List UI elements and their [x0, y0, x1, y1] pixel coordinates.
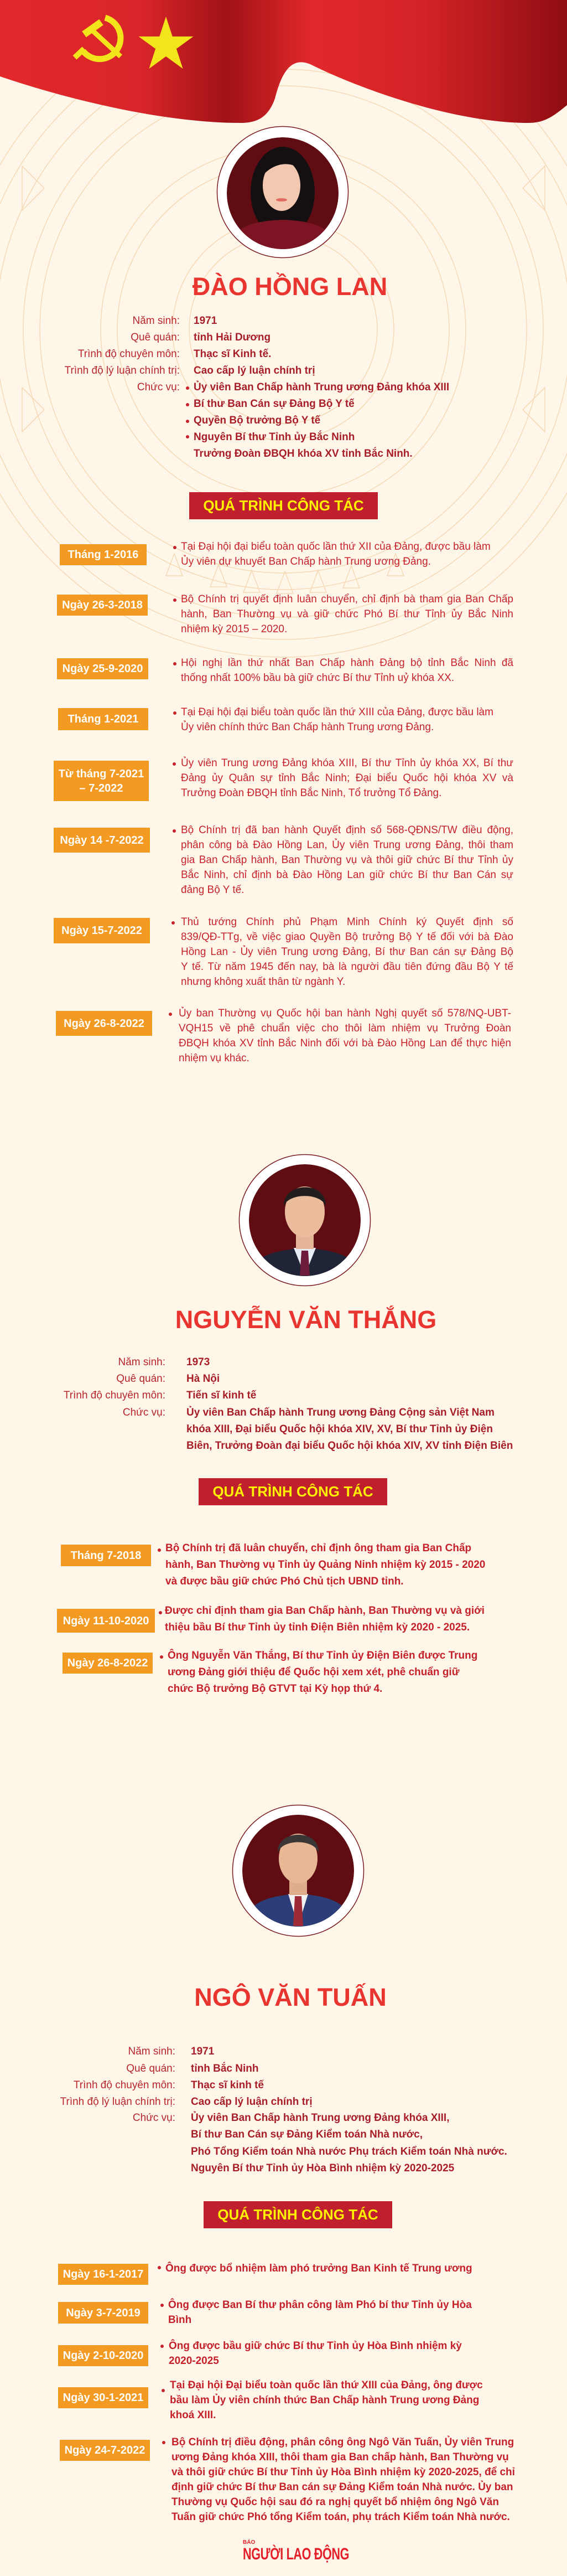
info: Nguyen Van Thang: Quê quán: [116, 1373, 165, 1385]
text: ương Đảng khóa XIII, thôi tham gia Ban chấp hành, Ban Thường vụ [171, 2451, 509, 2463]
info: Nguyen Van Thang: Hà Nội [186, 1373, 220, 1385]
timeline 2: Ngày 26-8-2022 [67, 1657, 148, 1669]
info: Ngo Van Tuan: Trình độ chuyên môn: [74, 2079, 175, 2091]
info: Ngo Van Tuan: Nguyên Bí thư Tỉnh ủy Hòa Bình nhiệm kỳ 2020-2025 [191, 2162, 454, 2174]
info: Dao Hong Lan: Quê quán: [131, 332, 180, 343]
text: gia Ban Chấp hành, Ban Thường vụ và thôi giữ chức Bí thư Tỉnh ủy [181, 854, 513, 866]
name: Ngo Van Tuan: NGÔ VĂN TUẤN [194, 1983, 387, 2011]
text: Thủ tướng Chính phủ Phạm Minh Chính ký Quyết định số [181, 916, 513, 928]
timeline 3: Ngày 30-1-2021 [63, 2392, 143, 2404]
text: bầu làm Ủy viên chính thức Ban Chấp hành Trung ương Đảng [170, 2394, 479, 2406]
info: Ngo Van Tuan: Bí thư Ban Cán sự Đảng Kiểm toán Nhà nước, [191, 2129, 423, 2140]
text: Ông được bầu giữ chức Bí thư Tỉnh ủy Hòa Bình nhiệm kỳ [169, 2340, 462, 2352]
text: đảng Bộ Y tế. [181, 884, 244, 896]
timeline 2 [57, 1545, 163, 1674]
info: Ngo Van Tuan: Cao cấp lý luận chính trị [191, 2096, 313, 2108]
info: Nguyen Van Thang: Năm sinh: [118, 1356, 165, 1368]
timeline text 2: Bộ Chính trị đã luân chuyển, chỉ định ông tham gia Ban Chấp [165, 1542, 471, 1554]
photo: Dao Hong Lan [217, 126, 348, 258]
text: Ủy viên Trung ương Đảng khóa XIII, Bí thư Tỉnh ủy khóa XX, Bí thư [181, 757, 513, 769]
info: Nguyen Van Thang: Chức vụ: [123, 1407, 165, 1418]
timeline 1: Ngày 14 -7-2022 [60, 834, 144, 846]
text: và thôi giữ chức Bí thư Tỉnh ủy Hòa Bình nhiệm kỳ 2020-2025, để chỉ [171, 2466, 515, 2478]
icon: star [138, 17, 194, 69]
info: Nguyen Van Thang: 1973 [186, 1356, 210, 1368]
text: định giữ chức Bí thư Ban cán sự Đảng Kiểm toán Nhà nước. Ủy ban [171, 2481, 513, 2493]
info: Nguyen Van Thang: Ủy viên Ban Chấp hành Trung ương Đảng Cộng sản Việt Nam [186, 1407, 495, 1418]
timeline text 3: Ông được bổ nhiệm làm phó trưởng Ban Kinh tế Trung ương [165, 2263, 472, 2274]
info: Ngo Van Tuan: Năm sinh: [128, 2046, 175, 2057]
text: phân công bà Đào Hồng Lan, Ủy viên Trung ương Đảng, thôi tham [181, 839, 513, 851]
text: chức Bộ trưởng Bộ GTVT tại Kỳ họp thứ 4. [168, 1683, 382, 1695]
info: Ngo Van Tuan: Ủy viên Ban Chấp hành Trung ương Đảng khóa XIII, [191, 2112, 449, 2124]
text: Tại Đại hội Đại biểu toàn quốc lần thứ XIII của Đảng, ông được [170, 2379, 483, 2391]
text: Tuấn giữ chức Phó tổng Kiểm toán, phụ trách Kiểm toán Nhà nước. [171, 2511, 510, 2523]
info: Dao Hong Lan: Nguyên Bí thư Tỉnh ủy Bắc Ninh [194, 431, 355, 443]
info: Ngo Van Tuan: Phó Tổng Kiểm toán Nhà nước Phụ trách Kiểm toán Nhà nước. [191, 2146, 507, 2157]
info: Dao Hong Lan: Bí thư Ban Cán sự Đảng Bộ Y tế [194, 398, 355, 410]
info: Nguyen Van Thang: Biên, Trưởng Đoàn đại biểu Quốc hội khóa XIV, XV tỉnh Điện Biên [186, 1440, 513, 1452]
timeline 1: Từ tháng 7-2021 [59, 767, 144, 779]
text: Được chỉ định tham gia Ban Chấp hành, Ban Thường vụ và giới [165, 1605, 485, 1617]
text: Thường vụ Quốc hội sau đó ra nghị quyết bổ nhiệm ông Ngô Văn [171, 2496, 499, 2508]
info: Nguyen Van Thang: Trình độ chuyên môn: [64, 1390, 165, 1401]
text: VQH15 về phê chuẩn việc cho thôi làm nhiệm vụ Trưởng Đoàn [179, 1023, 511, 1034]
timeline 1: Tháng 1-2021 [68, 713, 138, 725]
text: Bình [168, 2314, 191, 2326]
info: Ngo Van Tuan: Trình độ lý luận chính trị: [60, 2096, 175, 2108]
text: Ông được Ban Bí thư phân công làm Phó bí thư Tỉnh ủy Hòa [168, 2299, 472, 2311]
info: Dao Hong Lan: Cao cấp lý luận chính trị [194, 365, 315, 376]
info: Nguyen Van Thang [64, 1356, 513, 1452]
text: nhiệm vụ khác. [179, 1052, 249, 1064]
timeline 1: Ngày 15-7-2022 [61, 925, 142, 937]
name: Dao Hong Lan: ĐÀO HỒNG LAN [193, 272, 387, 301]
timeline 1: Ngày 26-8-2022 [64, 1018, 144, 1030]
info: Dao Hong Lan [65, 315, 449, 460]
logo: Nguoi Lao Dong: BÁO [243, 2539, 255, 2546]
text: thống nhất 100% bầu bà giữ chức Bí thư Tỉnh uỷ khóa XX. [181, 672, 454, 684]
info: Ngo Van Tuan: Thạc sĩ kinh tế [191, 2079, 264, 2091]
text: Bộ Chính trị điều động, phân công ông Ngô Văn Tuấn, Ủy viên Trung [171, 2436, 514, 2448]
text: Ủy viên chính thức Ban Chấp hành Trung ương Đảng. [181, 721, 434, 733]
text: thiệu bầu Bí thư Tỉnh ủy tỉnh Điện Biên nhiệm kỳ 2020 - 2025. [165, 1622, 470, 1633]
info: Ngo Van Tuan: 1971 [191, 2046, 214, 2057]
info: Dao Hong Lan: Trình độ lý luận chính trị: [65, 365, 180, 376]
timeline text 2 [165, 1542, 485, 1587]
text: 839/QĐ-TTg, về việc giao Quyền Bộ trưởng Bộ Y tế đối với bà Đào [181, 931, 513, 943]
text: ương Đảng giới thiệu để Quốc hội xem xét, phê chuẩn giữ [168, 1666, 459, 1678]
text: hành, Ban Thường vụ và giữ chức Phó Bí thư Tỉnh ủy Bắc Ninh [181, 608, 513, 620]
timeline 3: Ngày 2-10-2020 [63, 2350, 143, 2362]
timeline 3 [58, 2264, 165, 2461]
info: Nguyen Van Thang: khóa XIII, Đại biểu Quốc hội khóa XIV, XV, Bí thư Tỉnh ủy Điện [186, 1423, 493, 1435]
timeline 1: Ngày 25-9-2020 [63, 663, 143, 675]
info: Ngo Van Tuan: Chức vụ: [133, 2112, 175, 2124]
background drum pattern [0, 69, 567, 658]
timeline text 1: Ủy viên dự khuyết Ban Chấp hành Trung ương Đảng. [181, 556, 431, 567]
timeline 1: – 7-2022 [80, 782, 123, 794]
info: Dao Hong Lan: Năm sinh: [132, 315, 180, 327]
info: Dao Hong Lan: Ủy viên Ban Chấp hành Trung ương Đảng khóa XIII [194, 381, 449, 393]
icon: hammer and sickle [75, 18, 121, 59]
text: Đảng ủy Quân sự tỉnh Bắc Ninh; Đại biểu Quốc hội khóa XV và [181, 772, 513, 784]
text: Tại Đại hội đại biểu toàn quốc lần thứ XIII của Đảng, được bầu làm [181, 706, 493, 718]
timeline text 1 [181, 541, 491, 567]
info: Dao Hong Lan: Trưởng Đoàn ĐBQH khóa XV tỉnh Bắc Ninh. [194, 448, 413, 460]
text: Ủy ban Thường vụ Quốc hội ban hành Nghị quyết số 578/NQ-UBT- [179, 1008, 511, 1019]
info: Dao Hong Lan: 1971 [194, 315, 217, 327]
timeline 1: Ngày 26-3-2018 [62, 599, 143, 611]
timeline text 2: hành, Ban Thường vụ Tỉnh ủy Quảng Ninh nhiệm kỳ 2015 - 2020 [165, 1559, 485, 1571]
timeline text 1: Tại Đại hội đại biểu toàn quốc lần thứ XII của Đảng, được bầu làm [181, 541, 491, 553]
timeline 2: Ngày 11-10-2020 [63, 1614, 149, 1627]
banner: qua trinh cong tac 3 [204, 2201, 392, 2228]
timeline 3: Ngày 3-7-2019 [66, 2306, 141, 2319]
text: 2020-2025 [169, 2355, 219, 2367]
info: Ngo Van Tuan: tỉnh Bắc Ninh [191, 2063, 258, 2074]
timeline 2: Tháng 7-2018 [71, 1549, 141, 1561]
timeline 1 [54, 544, 176, 1036]
info: Ngo Van Tuan: Quê quán: [126, 2063, 175, 2074]
info: Nguyen Van Thang: Tiến sĩ kinh tế [186, 1390, 256, 1401]
timeline text 2: và được bầu giữ chức Phó Chủ tịch UBND tỉnh. [165, 1576, 404, 1587]
text: Bắc Ninh, chỉ định bà Đào Hồng Lan giữ chức Bí thư Ban Cán sự [181, 869, 513, 881]
info: Dao Hong Lan: Thạc sĩ Kinh tế. [194, 348, 271, 360]
info: Dao Hong Lan: tỉnh Hải Dương [194, 332, 271, 343]
text: ĐBQH khóa XV tỉnh Bắc Ninh đối với bà Đào Hồng Lan để thực hiện [179, 1037, 511, 1049]
text: Hội nghị lần thứ nhất Ban Chấp hành Đảng bộ tỉnh Bắc Ninh đã [181, 657, 513, 669]
photo: Nguyen Van Thang [239, 1154, 371, 1287]
text: Y tế. Từ năm 1945 đến nay, bà là người đầu tiên đứng đầu Bộ Y tế [181, 961, 513, 973]
timeline 1: Tháng 1-2016 [68, 549, 138, 561]
name: Nguyen Van Thang: NGUYỄN VĂN THẮNG [175, 1305, 436, 1334]
info: Dao Hong Lan: Quyền Bộ trưởng Bộ Y tế [194, 415, 320, 426]
text: Bộ Chính trị quyết định luân chuyển, chỉ định bà tham gia Ban Chấp [181, 593, 513, 605]
timeline 3: Ngày 16-1-2017 [63, 2268, 143, 2280]
banner: qua trinh cong tac 1 [189, 492, 378, 519]
banner: qua trinh cong tac 1: QUÁ TRÌNH CÔNG TÁC [203, 497, 364, 514]
text: Ông Nguyễn Văn Thắng, Bí thư Tỉnh ủy Điện Biên được Trung [168, 1650, 477, 1661]
banner: qua trinh cong tac 2 [199, 1478, 387, 1505]
photo: Ngo Van Tuan [232, 1805, 364, 1937]
flag header [0, 0, 567, 123]
timeline 3: Ngày 24-7-2022 [65, 2444, 145, 2456]
text: Hồng Lan - Ủy viên Trung ương Đảng, Bí thư Ban cán sự Đảng Bộ [181, 946, 513, 958]
text: khoá XIII. [170, 2409, 216, 2421]
info: Dao Hong Lan: Trình độ chuyên môn: [78, 348, 180, 360]
logo: Nguoi Lao Dong: NGƯỜI LAO ĐỘNG [243, 2545, 349, 2563]
text: Trưởng Đoàn ĐBQH tỉnh Bắc Ninh, Tổ trưởng Tổ Đảng. [181, 787, 441, 799]
text: Bộ Chính trị đã ban hành Quyết định số 568-QĐNS/TW điều động, [181, 824, 513, 836]
banner: qua trinh cong tac 3: QUÁ TRÌNH CÔNG TÁC [217, 2206, 378, 2223]
banner: qua trinh cong tac 2: QUÁ TRÌNH CÔNG TÁC [212, 1483, 373, 1500]
info: Ngo Van Tuan [60, 2046, 507, 2174]
text: nhưng không xuất thân từ ngành Y. [181, 976, 345, 988]
info: Dao Hong Lan: Chức vụ: [137, 381, 180, 393]
text: nhiệm kỳ 2015 – 2020. [181, 623, 287, 635]
